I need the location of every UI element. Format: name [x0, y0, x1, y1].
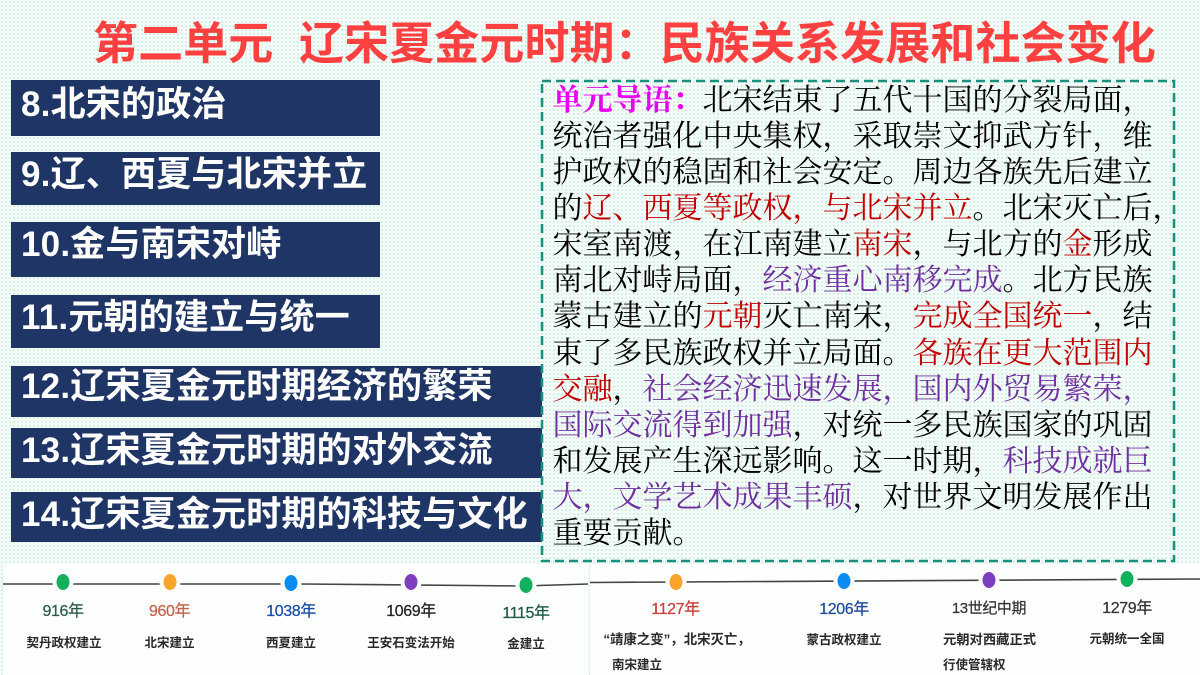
event: 916: 契丹政权建立	[26, 636, 102, 650]
lesson bar: 10: 10.金与南宋对峙	[21, 225, 281, 264]
lesson bar: 13	[11, 428, 542, 478]
event: 1127: 南宋建立	[612, 658, 662, 672]
event: 960: 北宋建立	[144, 636, 195, 650]
text block: unit introduction: 重要贡献。	[552, 517, 702, 550]
lesson bar: 10	[11, 222, 380, 277]
event: 1127: 1127年	[651, 601, 700, 618]
event: 1038	[266, 575, 316, 650]
panel: unit introduction dashed frame	[540, 80, 1176, 562]
lesson bar: 8	[11, 80, 380, 136]
text block: unit introduction: 的辽、西夏等政权，与北宋并立。北宋灭亡后，	[552, 192, 1182, 225]
title: 辽宋夏金元时期：民族关系发展和社会变化	[299, 18, 1156, 69]
event: 960	[144, 574, 195, 650]
text block: unit introduction: 统治者强化中央集权，采取崇文抑武方针，维	[552, 120, 1152, 153]
event: 1115	[502, 577, 550, 651]
text block: unit introduction: 单元导语：北宋结束了五代十国的分裂局面，	[552, 84, 1152, 116]
text block: unit introduction: 束了多民族政权并立局面。各族在更大范围内	[552, 337, 1152, 370]
text block: unit introduction: 南北对峙局面，经济重心南移完成。北方民族	[552, 264, 1152, 297]
event: 1206: 1206年	[819, 601, 869, 618]
event: 1279	[1089, 571, 1165, 646]
lesson bar: 13: 13.辽宋夏金元时期的对外交流	[21, 431, 493, 470]
lesson bar: 12	[11, 366, 542, 417]
lesson bar: 11: 11.元朝的建立与统一	[21, 298, 350, 337]
event: 1206: 蒙古政权建立	[806, 633, 882, 647]
lesson bar: 12: 12.辽宋夏金元时期经济的繁荣	[21, 367, 493, 406]
text block: unit introduction: 蒙古建立的元朝灭亡南宋，完成全国统一，结	[552, 300, 1152, 333]
lesson bar: 9: 9.辽、西夏与北宋并立	[21, 155, 367, 194]
event: mid 13th century: 行使管辖权	[943, 658, 1006, 672]
event: 1279: 元朝统一全国	[1089, 632, 1165, 646]
event: 1127	[603, 574, 751, 672]
event: 960: 960年	[149, 603, 190, 620]
event: 1127: “靖康之变”，北宋灭亡，	[603, 632, 751, 647]
event: mid 13th century: 元朝对西藏正式	[943, 632, 1036, 647]
text block: unit introduction: 护政权的稳固和社会安定。周边各族先后建立	[552, 156, 1152, 189]
event: 1069: 王安石变法开始	[367, 636, 455, 650]
event: 1069: 1069年	[386, 603, 436, 620]
text block: unit introduction: 宋室南渡，在江南建立南宋，与北方的金形成	[552, 228, 1152, 261]
text block: unit introduction	[552, 84, 1182, 550]
event: 1115: 金建立	[507, 637, 545, 651]
text block: unit introduction: 国际交流得到加强，对统一多民族国家的巩固	[552, 409, 1152, 442]
event: 1279: 1279年	[1102, 600, 1152, 617]
event: 916: 916年	[42, 603, 84, 620]
event: mid 13th century: 13世纪中期	[952, 600, 1026, 617]
event: 1038: 西夏建立	[266, 636, 316, 650]
event: 1206	[806, 573, 882, 647]
timeline: left section	[3, 564, 588, 675]
lesson bar: 11	[11, 295, 380, 348]
event: 1115: 1115年	[502, 605, 550, 622]
text block: unit introduction: 和发展产生深远影响。这一时期，科技成就巨	[552, 445, 1152, 478]
event: mid 13th century	[943, 572, 1036, 672]
event: 1069	[367, 574, 455, 650]
lesson bar: 8: 8.北宋的政治	[21, 85, 227, 124]
lesson bar: 14: 14.辽宋夏金元时期的科技与文化	[21, 495, 528, 534]
title: 第二单元	[93, 18, 273, 69]
lesson bar: 9	[11, 152, 380, 205]
event: 916	[26, 574, 102, 650]
timeline: right section	[590, 564, 1200, 675]
event: 1038: 1038年	[266, 603, 316, 620]
text block: unit introduction: 大，文学艺术成果丰硕，对世界文明发展作出	[552, 481, 1152, 514]
text block: unit introduction: 交融，社会经济迅速发展，国内外贸易繁荣，	[552, 373, 1152, 406]
